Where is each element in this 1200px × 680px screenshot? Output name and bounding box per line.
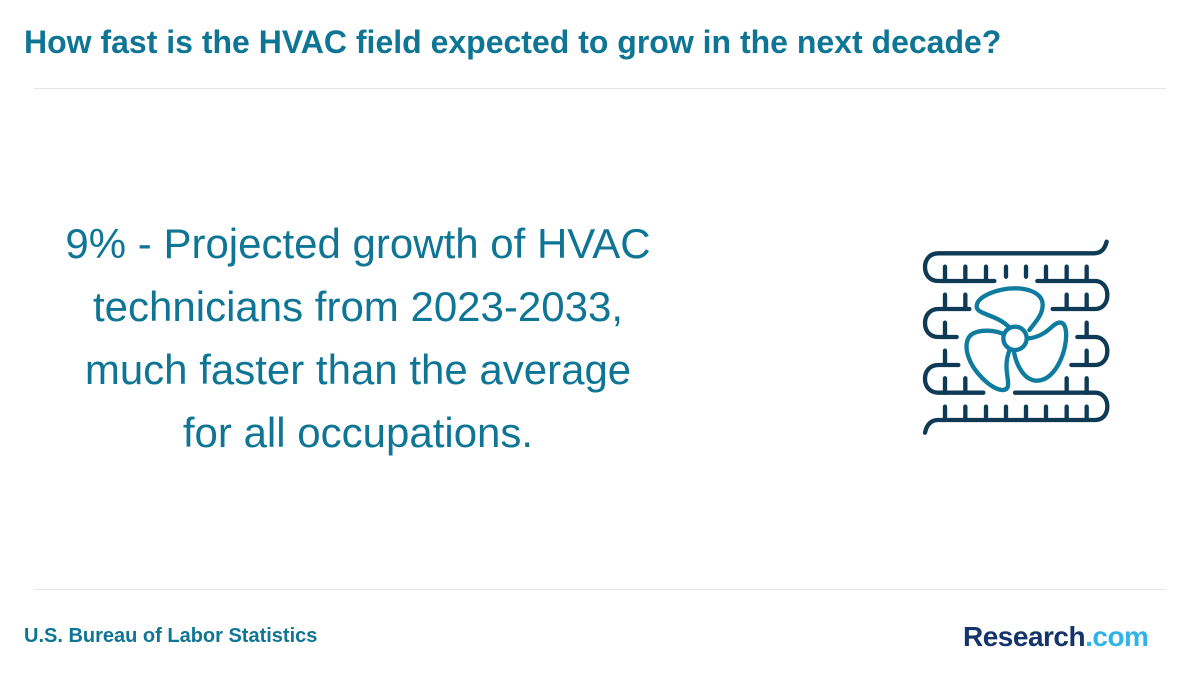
- main statistic text: 9% - Projected growth of HVAC: [65, 220, 651, 267]
- title: How fast is the HVAC field expected to grow in the next decade?: [24, 24, 1001, 60]
- coil tubes: [925, 242, 1107, 433]
- main statistic text: technicians from 2023-2033,: [93, 283, 623, 330]
- main statistic text: for all occupations.: [183, 409, 533, 456]
- source: U.S. Bureau of Labor Statistics: [24, 625, 317, 647]
- fan: [967, 288, 1066, 390]
- logo: Research.com: [963, 621, 1148, 652]
- icon: HVAC coil with fan: [922, 240, 1110, 435]
- main statistic text: [65, 220, 651, 456]
- main statistic text: much faster than the average: [85, 346, 631, 393]
